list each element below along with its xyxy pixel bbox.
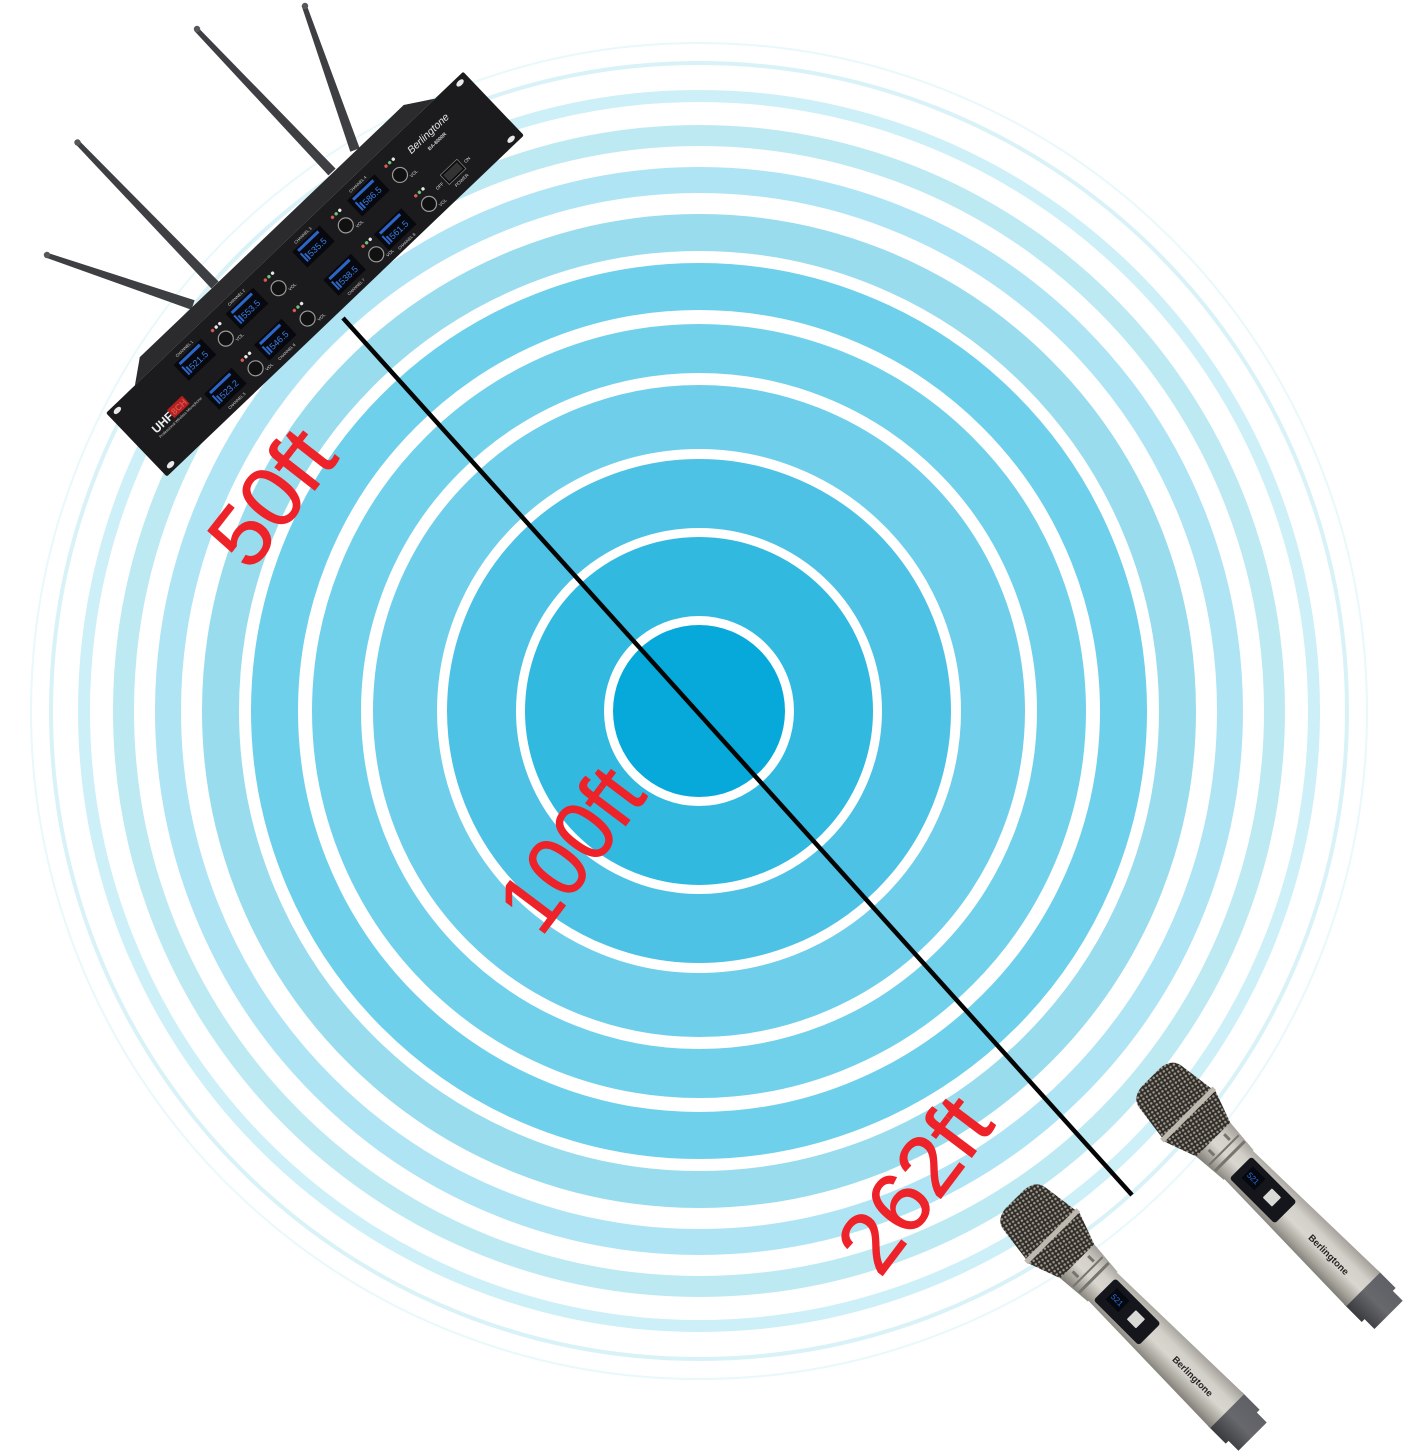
brand name: Berlingtone xyxy=(405,111,452,157)
mic handle xyxy=(1220,1147,1380,1306)
VOL labels xyxy=(235,166,448,373)
UHF logo: 8CH xyxy=(169,397,189,417)
VOL labels: VOL xyxy=(438,197,448,207)
power switch xyxy=(431,152,479,199)
label: 100ft: 100ft xyxy=(480,749,663,949)
display: channel 2 xyxy=(226,288,268,330)
display: channel 4: 586.5 xyxy=(361,185,384,207)
label: 50ft: 50ft xyxy=(189,410,355,585)
microphone: front: 521 xyxy=(1109,1292,1125,1309)
microphone: front xyxy=(989,1173,1279,1454)
display: channel 2: 553.5 xyxy=(239,298,262,321)
mic screen xyxy=(1242,1166,1266,1190)
volume knobs xyxy=(215,162,440,380)
VOL labels: VOL xyxy=(235,332,245,342)
display: channel 1 xyxy=(174,339,216,381)
channel labels: CHANNEL 8 xyxy=(397,231,417,251)
wireless receiver xyxy=(94,59,524,477)
mic neck rings xyxy=(1196,1123,1256,1182)
status LEDs xyxy=(210,155,425,364)
mic tail xyxy=(1344,1270,1406,1332)
ear mounting holes xyxy=(112,78,518,470)
VOL labels: VOL xyxy=(385,248,395,258)
VOL labels: VOL xyxy=(409,168,419,178)
display: channel 1: 521.5 xyxy=(187,349,210,372)
channel labels: CHANNEL 5 xyxy=(227,391,247,410)
display: channel 8: 561.5 xyxy=(387,219,411,241)
mic screen xyxy=(1106,1288,1130,1312)
display: channel 3: 535.5 xyxy=(306,236,329,259)
display: channel 7 xyxy=(323,254,366,296)
power switch: POWER xyxy=(454,172,470,188)
UHF logo: Professional Wireless Microphone xyxy=(159,396,203,439)
VOL labels: VOL xyxy=(316,312,327,322)
VOL labels: VOL xyxy=(264,362,275,372)
power switch: OFF xyxy=(435,181,445,191)
label: 262ft: 262ft xyxy=(819,1078,1011,1290)
display: channel 7: 538.5 xyxy=(337,264,360,287)
mic head grille xyxy=(990,1174,1077,1261)
mic brand: Berlingtone xyxy=(1170,1354,1215,1399)
UHF logo xyxy=(149,386,203,439)
display: channel 3 xyxy=(292,225,335,268)
mic head grille xyxy=(1126,1053,1213,1139)
distance line xyxy=(343,318,1132,1195)
VOL labels: VOL xyxy=(355,219,365,229)
antennas xyxy=(44,3,360,310)
receiver front panel xyxy=(106,72,524,477)
mic button xyxy=(1127,1310,1145,1328)
mic brand: Berlingtone xyxy=(1306,1233,1351,1278)
VOL labels: VOL xyxy=(287,281,298,292)
mic control plate xyxy=(1093,1278,1161,1345)
channel labels: CHANNEL 3 xyxy=(293,225,313,245)
display: channel 6: 546.5 xyxy=(267,329,291,352)
model number: BA-8000R xyxy=(427,131,448,152)
receiver top cover xyxy=(123,86,435,385)
mic handle xyxy=(1084,1268,1244,1428)
mic control plate xyxy=(1229,1156,1297,1224)
mic neck rings xyxy=(1060,1244,1120,1304)
display: channel 4 xyxy=(347,174,390,217)
display: channel 5: 523.2 xyxy=(217,378,241,401)
microphone: rear xyxy=(1125,1051,1407,1341)
UHF logo: UHF xyxy=(149,409,176,436)
display: channel 8 xyxy=(374,208,417,250)
display: channel 6 xyxy=(254,319,297,361)
channel labels xyxy=(174,173,420,413)
channel labels: CHANNEL 2 xyxy=(226,287,247,307)
display: channel 5 xyxy=(204,368,247,410)
power switch: ON xyxy=(463,156,471,164)
mic tail xyxy=(1208,1392,1270,1454)
channel labels: CHANNEL 6 xyxy=(277,342,297,361)
mic button xyxy=(1263,1188,1281,1207)
channel labels: CHANNEL 7 xyxy=(346,277,366,296)
microphone: rear: 521 xyxy=(1245,1171,1261,1187)
channel labels: CHANNEL 4 xyxy=(348,174,368,194)
channel labels: CHANNEL 1 xyxy=(174,339,195,358)
